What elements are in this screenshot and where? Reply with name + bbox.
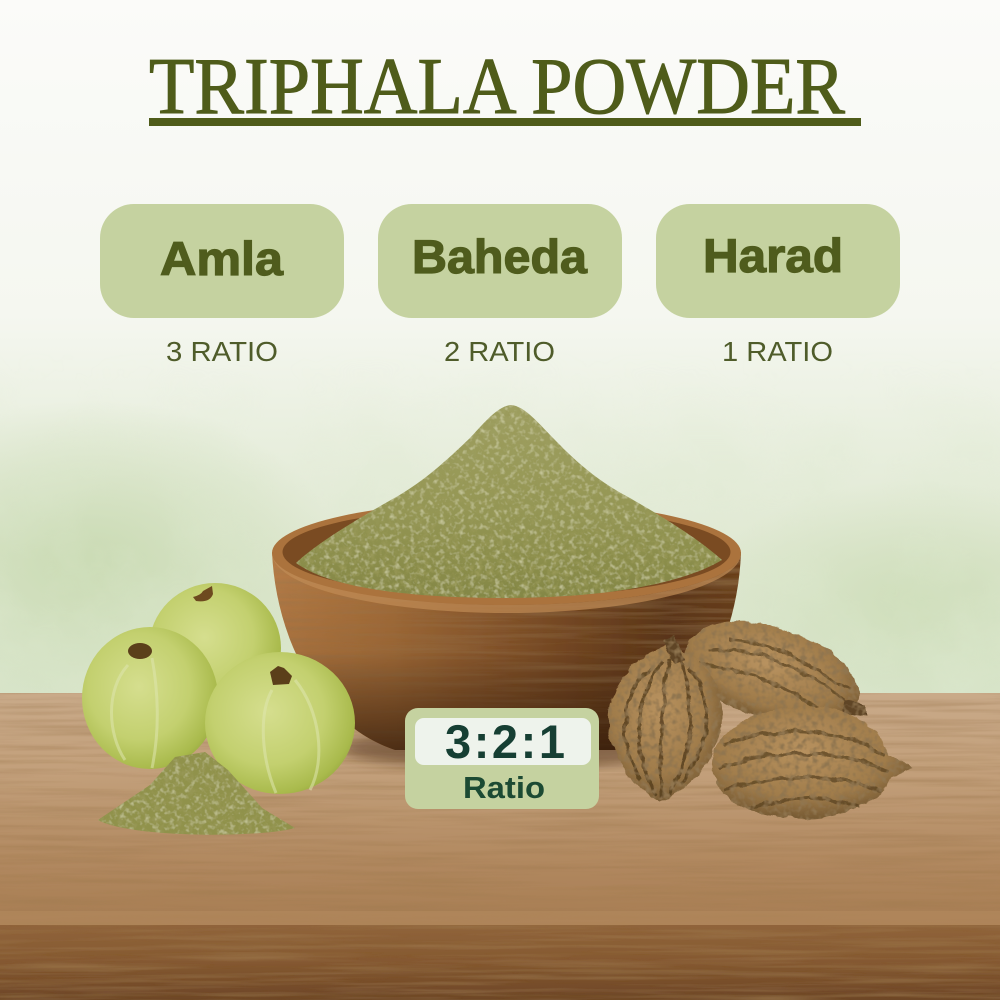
amla right bbox=[205, 652, 355, 794]
title: TRIPHALA POWDER bbox=[149, 43, 846, 131]
nut back bbox=[672, 602, 872, 746]
ingredient: Baheda: Baheda bbox=[412, 230, 588, 283]
amla fruits bbox=[82, 583, 355, 835]
nut left bbox=[609, 636, 722, 802]
ingredient: Amla: Amla bbox=[160, 232, 284, 285]
ingredient: Baheda bbox=[378, 204, 622, 367]
ratio badge bbox=[405, 708, 599, 809]
ratio badge: Ratio bbox=[463, 770, 545, 805]
powder pile in bowl bbox=[296, 405, 722, 598]
haritaki nuts bbox=[609, 602, 912, 818]
ratio badge: 3:2:1 bbox=[445, 715, 565, 768]
wooden table bbox=[0, 693, 1000, 1000]
ingredient: Amla: 3 RATIO bbox=[166, 336, 278, 367]
amla back bbox=[149, 583, 281, 713]
wooden bowl with powder bbox=[272, 405, 741, 768]
background wall bbox=[0, 0, 1000, 750]
amla left bbox=[82, 627, 218, 769]
ingredient: Harad bbox=[656, 204, 900, 367]
ingredient: Harad: 1 RATIO bbox=[722, 336, 833, 367]
ingredient: Harad: Harad bbox=[703, 229, 843, 282]
small powder pile bbox=[98, 752, 295, 835]
ingredient: Baheda: 2 RATIO bbox=[444, 336, 555, 367]
nut front bbox=[712, 706, 912, 818]
ingredient: Amla bbox=[100, 204, 344, 367]
